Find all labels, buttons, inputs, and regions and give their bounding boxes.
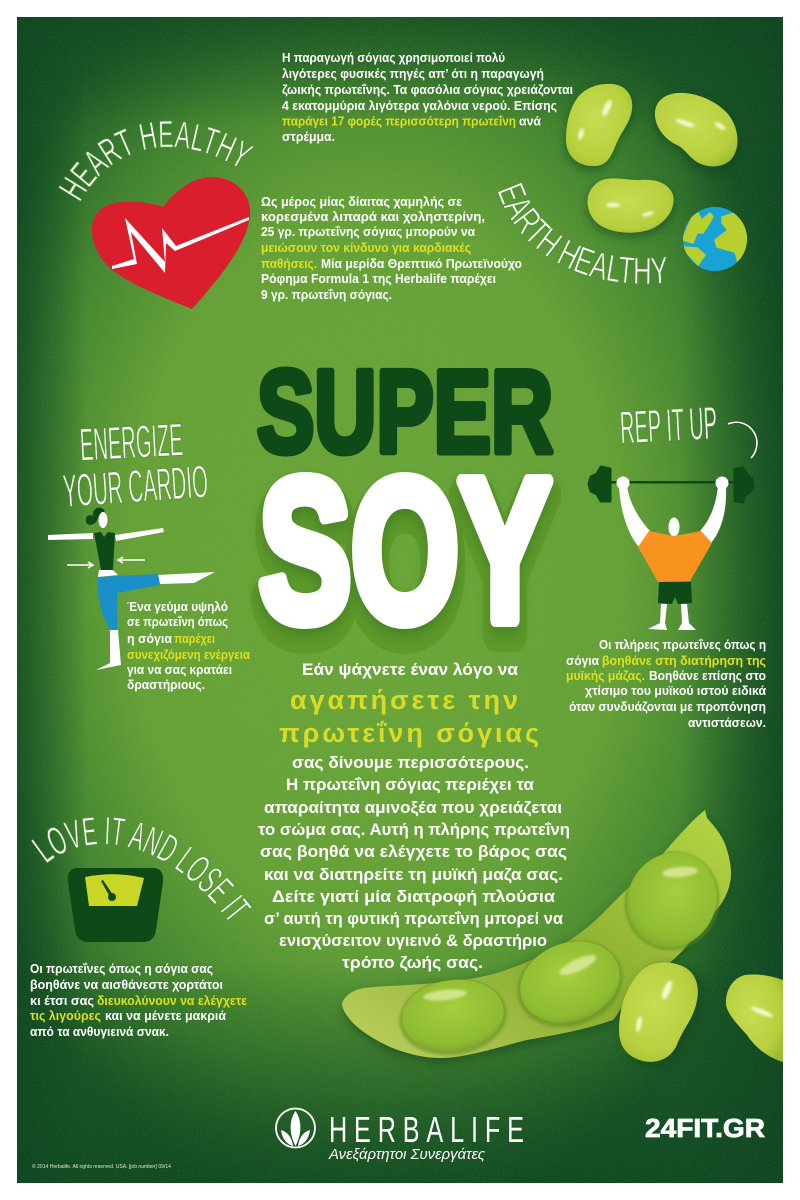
body paragraph: το σώμα σας. Αυτή η πλήρης πρωτεΐνη: [258, 821, 570, 839]
bean 1: [566, 84, 632, 166]
pod: [342, 810, 731, 1058]
soy shadow halo: SOY: [259, 451, 551, 677]
love it text block: κι έτσι σας: [30, 993, 94, 1008]
logo mark: [276, 1108, 315, 1148]
title word: soy: SOY: [259, 437, 551, 663]
rep it up text block: Βοηθάνε επίσης στο: [649, 668, 766, 683]
earth healthy text block: ζωικής πρωτεΐνης. Τα φασόλια σόγιας χρειάζονται: [282, 82, 573, 97]
energize text block: η σόγια: [127, 631, 172, 646]
rep it up text block: [566, 637, 766, 730]
title: heart healthy: HEART HEALTHY: [58, 120, 254, 202]
love it and lose it heading: LOVE IT AND LOSE IT: [30, 816, 252, 920]
loose bean: [619, 962, 698, 1062]
soybeans: top group: [566, 84, 738, 237]
body paragraph: τρόπο ζωής σας.: [342, 954, 483, 972]
body paragraph: Η πρωτεΐνη σόγιας περιέχει τα: [286, 776, 534, 794]
pea 2: [520, 942, 620, 1022]
body paragraph: [258, 754, 570, 972]
earth healthy text block: παράγει 17 φορές περισσότερη πρωτεΐνη: [282, 114, 516, 128]
copyright line: © 2014 Herbalife. All rights reserved. USA. [job number] 09/14: [32, 1163, 171, 1170]
love it text block: από τα ανθυγιεινά σνακ.: [30, 1024, 169, 1039]
pea 3: [627, 852, 717, 947]
body paragraph: Δείτε γιατί μία διατροφή πλούσια: [272, 888, 555, 906]
rep it up text block: Οι πλήρεις πρωτεΐνες όπως η: [599, 637, 766, 652]
icon: heart: [92, 177, 250, 309]
icon: globe: [683, 207, 748, 271]
heart healthy text block: κορεσμένα λιπαρά και χοληστερίνη,: [261, 209, 485, 224]
heart healthy text block: 9 γρ. πρωτεΐνη σόγιας.: [261, 287, 392, 302]
bean 3: [587, 178, 674, 233]
highlighted phrase: πρωτεΐνη σόγιας: [279, 718, 539, 748]
heart healthy text block: μειώσουν τον κίνδυνο για καρδιακές: [261, 240, 471, 255]
text: YOUR CARDIO: [61, 455, 210, 517]
rep it up text block: αντιστάσεων.: [688, 715, 766, 730]
energize text block: για να σας κρατάει: [127, 662, 232, 677]
rep it up text block: βοηθάνε στη διατήρηση της: [602, 653, 766, 668]
arrow: rep it up: [728, 422, 757, 458]
heart healthy text block: Ως μέρος μίας δίαιτας χαμηλής σε: [261, 194, 462, 209]
energize your cardio heading: [62, 423, 208, 507]
body paragraph: σας βοηθά να ελέγχετε το βάρος σας: [260, 843, 567, 861]
heart healthy text block: Ρόφημα Formula 1 της Herbalife παρέχει: [261, 271, 496, 286]
energize text block: σε πρωτεΐνη όπως: [127, 614, 228, 629]
energize text block: Ένα γεύμα υψηλό: [127, 599, 228, 614]
heart healthy text block: 25 γρ. πρωτεΐνης σόγιας μπορούν να: [261, 224, 475, 239]
heart healthy text block: Μία μερίδα Θρεπτικό Πρωτεϊνούχο: [321, 256, 522, 271]
love it text block: τις λιγούρες: [30, 1008, 101, 1023]
bean 2: [655, 93, 738, 166]
title word: super: SUPER: [257, 346, 553, 477]
highlighted phrase: αγαπήσετε την: [290, 685, 518, 715]
title: super soy: SOY: [259, 445, 551, 671]
bean at right edge: [726, 974, 783, 1062]
body paragraph: σ’ αυτή τη φυτική πρωτεΐνη μπορεί να: [264, 910, 563, 928]
love it text block: βοηθάνε να αισθάνεστε χορτάτοι: [30, 977, 223, 992]
herbalife logo: [276, 1108, 531, 1163]
24fit.gr logo: 24FIT.GR: [645, 1113, 765, 1143]
earth healthy text block: Η παραγωγή σόγιας χρησιμοποιεί πολύ: [282, 50, 505, 65]
highlighted phrase: [279, 685, 539, 748]
rep it up text block: μυϊκής μάζας.: [566, 668, 645, 683]
intro line: Εάν ψάχνετε έναν λόγο να: [302, 661, 518, 679]
central intro text: [258, 661, 570, 972]
wordmark: HERBALIFE: [329, 1110, 531, 1150]
heart healthy text block: παθήσεις.: [261, 256, 317, 271]
energize your cardio heading: ENERGIZE: [79, 413, 184, 471]
rep it up text block: χτίσιμο του μυϊκού ιστού ειδικά: [585, 683, 766, 698]
earth healthy text block: [282, 50, 573, 144]
earth healthy heading: EARTH HEALTHY: [497, 183, 666, 284]
rep it up text block: όταν συνδυάζονται με προπόνηση: [569, 699, 766, 714]
energize text block: συνεχιζόμενη ενέργεια: [127, 647, 250, 662]
earth healthy text block: 4 εκατομμύρια λιγότερα γαλόνια νερού. Επίσης: [282, 98, 557, 113]
body paragraph: σας δίνουμε περισσότερους.: [292, 754, 529, 772]
icon: weightlifter: [589, 467, 753, 630]
icon: woman balancing: [48, 508, 215, 670]
earth healthy text block: ανά: [519, 114, 541, 128]
rep it up text block: σόγια: [566, 653, 599, 668]
earth healthy text block: στρέμμα.: [282, 129, 335, 144]
title: super soy: [257, 346, 553, 677]
body paragraph: ενισχύσειτον υγιεινό & δραστήριο: [279, 932, 547, 950]
love it text block: Οι πρωτεΐνες όπως η σόγια σας: [30, 961, 213, 976]
soybean pod with loose beans: [342, 810, 783, 1064]
body paragraph: απαραίτητα αμινοξέα που χρειάζεται: [264, 799, 562, 817]
body paragraph: και να διατηρείτε τη μυϊκή μαζα σας.: [264, 866, 563, 884]
heart healthy text block: [261, 194, 522, 302]
tagline: Ανεξάρτητοι Συνεργάτες: [328, 1146, 486, 1163]
icon: scale: [68, 868, 163, 942]
love it text block: και να μένετε μακριά: [105, 1008, 226, 1023]
energize text block: [127, 599, 250, 692]
energize text block: παρέχει: [174, 631, 215, 646]
love it text block: [30, 961, 247, 1039]
pea 1: [402, 980, 504, 1050]
energize text block: δραστήριους.: [127, 677, 205, 692]
earth healthy text block: λιγότερες φυσικές πηγές απ’ ότι η παραγωγή: [282, 66, 544, 81]
love it text block: διευκολύνουν να ελέγχετε: [97, 993, 247, 1008]
